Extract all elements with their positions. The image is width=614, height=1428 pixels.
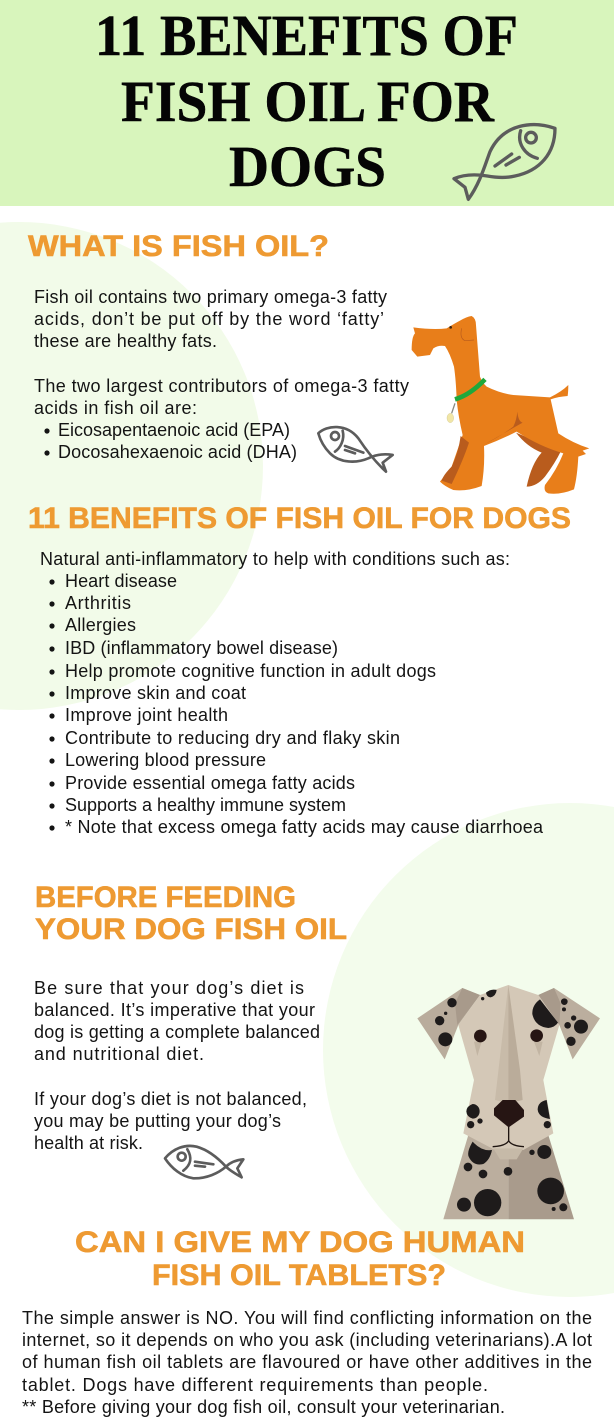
text block: what is fish oil: acids, don’t be put off by the word ‘fatty’ bbox=[34, 309, 384, 329]
text block: what is fish oil bbox=[34, 287, 409, 462]
benefits list: Supports a healthy immune system bbox=[65, 795, 346, 815]
benefits list: Improve skin and coat bbox=[65, 683, 246, 703]
text block: human tablets answer: of human fish oil tablets are flavoured or have other additives in the bbox=[22, 1352, 592, 1372]
heading: human fish oil tablets: FISH OIL TABLETS? bbox=[152, 1259, 446, 1292]
text block: what is fish oil: Docosahexaenoic acid (DHA) bbox=[58, 442, 297, 462]
benefits list: Natural anti-inflammatory to help with conditions such as: bbox=[40, 549, 510, 569]
icon: header fish bbox=[454, 125, 555, 199]
text block: before feeding: Be sure that your dog’s diet is bbox=[34, 978, 304, 998]
text block: before feeding: you may be putting your dog’s bbox=[34, 1111, 281, 1131]
text block: what is fish oil: The two largest contributors of omega-3 fatty bbox=[34, 376, 409, 396]
heading: human fish oil tablets: CAN I GIVE MY DOG HUMAN bbox=[75, 1226, 525, 1259]
text block: what is fish oil: acids in fish oil are: bbox=[34, 398, 197, 418]
text block: human tablets answer bbox=[22, 1308, 592, 1417]
heading: 11 benefits: 11 BENEFITS OF FISH OIL FOR DOGS bbox=[28, 502, 571, 535]
text block: human tablets answer: ** Before giving your dog fish oil, consult your veterinarian. bbox=[22, 1397, 505, 1417]
text block: before feeding: health at risk. bbox=[34, 1133, 143, 1153]
text block: human tablets answer: The simple answer is NO. You will find conflicting information on the bbox=[22, 1308, 592, 1328]
benefits list: * Note that excess omega fatty acids may cause diarrhoea bbox=[65, 817, 544, 837]
text block: what is fish oil: Eicosapentaenoic acid (EPA) bbox=[58, 420, 290, 440]
title bbox=[95, 3, 518, 199]
title: 11 BENEFITS OF bbox=[95, 3, 518, 68]
heading: what is fish oil: WHAT IS FISH OIL? bbox=[28, 230, 329, 263]
heading: before feeding: YOUR DOG FISH OIL bbox=[35, 913, 347, 946]
benefits list: Allergies bbox=[65, 615, 136, 635]
title: DOGS bbox=[229, 134, 386, 199]
benefits list bbox=[40, 549, 544, 837]
background circle: left bbox=[0, 222, 263, 710]
benefits list: Help promote cognitive function in adult dogs bbox=[65, 661, 436, 681]
benefits list: Improve joint health bbox=[65, 705, 228, 725]
background circle: right bbox=[323, 803, 614, 1297]
icon: fish lower bbox=[165, 1146, 243, 1178]
benefits list: Provide essential omega fatty acids bbox=[65, 773, 355, 793]
text block: before feeding: and nutritional diet. bbox=[34, 1044, 204, 1064]
benefits list: Contribute to reducing dry and flaky skin bbox=[65, 728, 400, 748]
text block: what is fish oil: Fish oil contains two primary omega-3 fatty bbox=[34, 287, 387, 307]
text block: before feeding: balanced. It’s imperative that your bbox=[34, 1000, 315, 1020]
text block: human tablets answer: tablet. Dogs have different requirements than people. bbox=[22, 1375, 488, 1395]
illustration: orange terrier bbox=[412, 316, 589, 494]
benefits list: IBD (inflammatory bowel disease) bbox=[65, 638, 338, 658]
text block: what is fish oil: these are healthy fats. bbox=[34, 331, 217, 351]
heading: before feeding: BEFORE FEEDING bbox=[35, 881, 296, 914]
benefits list: Lowering blood pressure bbox=[65, 750, 266, 770]
text block: before feeding: If your dog’s diet is not balanced, bbox=[34, 1089, 307, 1109]
illustration: dalmatian bbox=[417, 985, 600, 1219]
heading: before feeding bbox=[35, 881, 347, 946]
header banner bbox=[0, 0, 614, 206]
benefits list: Arthritis bbox=[65, 593, 131, 613]
benefits list: Heart disease bbox=[65, 571, 177, 591]
icon: small fish bbox=[318, 427, 393, 472]
heading: human fish oil tablets bbox=[75, 1226, 525, 1292]
text block: before feeding bbox=[34, 978, 320, 1153]
text block: human tablets answer: internet, so it depends on who you ask (including veterinarians).A lot bbox=[22, 1330, 592, 1350]
title: FISH OIL FOR bbox=[121, 69, 495, 134]
text block: before feeding: dog is getting a complete balanced bbox=[34, 1022, 320, 1042]
